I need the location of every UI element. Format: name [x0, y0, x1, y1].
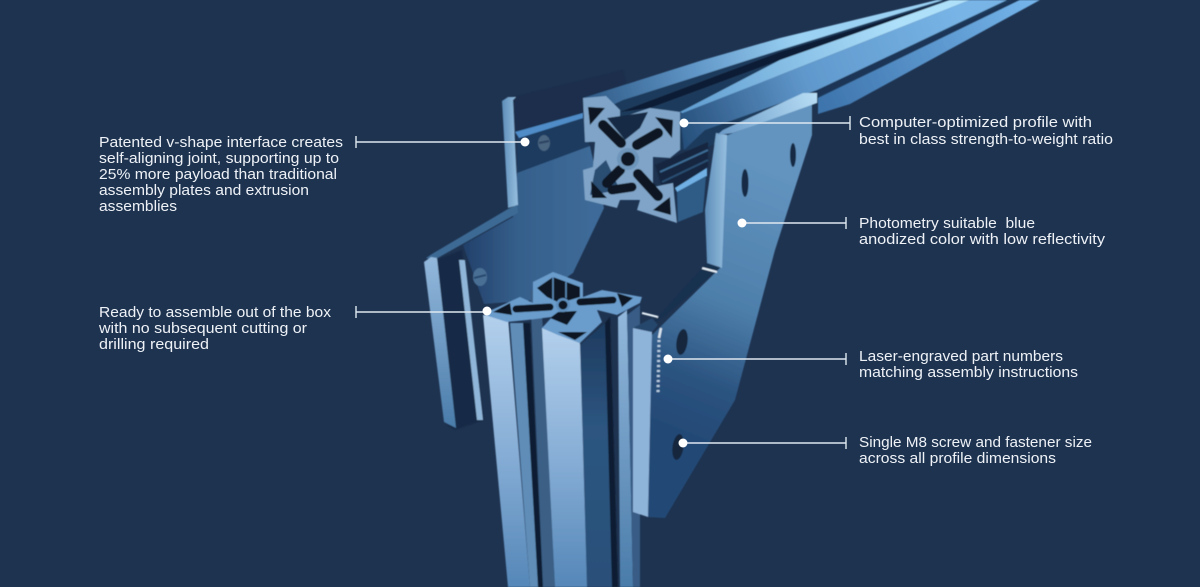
text: anodized color [859, 216, 1106, 248]
text: laser-engraved numbers: Laser-engraved part numbers [859, 349, 1063, 365]
text: laser-engraved numbers [859, 349, 1078, 381]
leader: M8 screw [678, 437, 846, 449]
back plate [424, 70, 627, 430]
text: ready to assemble: with no subsequent cutting or [98, 321, 307, 337]
text: computer-optimized profile [859, 115, 1113, 148]
text: ready to assemble: drilling required [99, 337, 209, 353]
text: v-shape interface: assembly plates and extrusion [99, 183, 309, 199]
text: v-shape interface: Patented v-shape interface creates [99, 135, 343, 151]
text: computer-optimized profile: best in class strength-to-weight ratio [859, 132, 1113, 148]
text: M8 screw: across all profile dimensions [859, 451, 1056, 467]
text: ready to assemble: Ready to assemble out of the box [99, 305, 332, 321]
text: v-shape interface: self-aligning joint, supporting up to [99, 151, 339, 167]
long rail [583, 0, 1040, 222]
text: anodized color: anodized color with low reflectivity [859, 232, 1106, 248]
text: v-shape interface: assemblies [99, 199, 177, 215]
lower profile cross-section [485, 272, 642, 343]
text: anodized color: Photometry suitable blue [859, 216, 1035, 232]
text: computer-optimized profile: Computer-optimized profile with [859, 115, 1092, 131]
text: laser-engraved numbers: matching assembly instructions [859, 365, 1078, 381]
leader: ready to assemble [356, 306, 492, 318]
leader: anodized color [738, 217, 846, 229]
text: v-shape interface [99, 135, 343, 215]
lower column extrusion [483, 290, 640, 587]
text: M8 screw [859, 435, 1092, 467]
upper profile cross-section [583, 96, 680, 223]
text: v-shape interface: 25% more payload than traditional [99, 167, 337, 183]
illustration: extrusion assembly [424, 0, 1040, 587]
leader: v-shape interface [356, 136, 530, 148]
front plate [633, 93, 817, 518]
text: M8 screw: Single M8 screw and fastener size [859, 435, 1092, 451]
text: ready to assemble [98, 305, 332, 353]
leader: laser-engraved numbers [664, 353, 846, 365]
leader: computer-optimized profile [680, 116, 850, 130]
